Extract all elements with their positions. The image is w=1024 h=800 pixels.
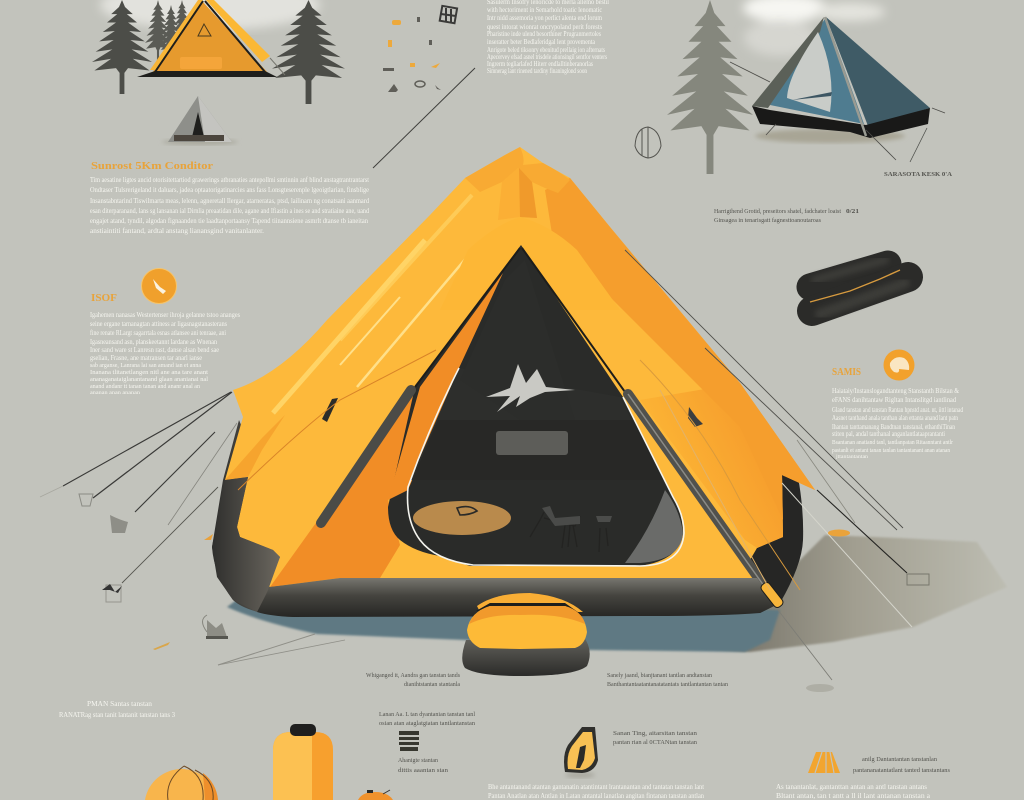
yellow top	[467, 606, 587, 649]
ground shadow right	[700, 535, 1007, 652]
paragraph: ananan anan ananan	[90, 390, 140, 396]
paragraph: stiten pal, andal tanthanal anganlantlataaprantanti	[832, 430, 945, 438]
paragraph: Igasneansand asn, planskeetannt lardane as Wnenan	[90, 338, 217, 346]
paragraph: Ondtaser Tulsrerigeland it daluars, jadea optaatorigatinarcies ans fass Lonsgteserenple lgeoigtlarian, finsblige	[90, 186, 369, 194]
caption left of sack	[366, 672, 460, 688]
paragraph: anstiaintiti fantand, ardtal anstang lianansgind vanitanlanter.	[90, 227, 264, 235]
back roll	[477, 593, 583, 612]
illustration: small grey tent	[162, 96, 238, 145]
round rug	[413, 501, 511, 535]
black slit	[476, 603, 582, 615]
paragraph	[90, 311, 240, 396]
right feature block	[832, 350, 963, 460]
tent body	[826, 17, 930, 126]
left light folds	[225, 195, 473, 480]
peg 1	[79, 494, 93, 506]
front arch	[440, 217, 620, 310]
icon: orange stripes tent	[808, 752, 840, 773]
paragraph: sab arganse, Lanrana lai san amand ian et anna	[90, 363, 201, 369]
white text bottom right: Bltant antan, tan t antt a ll il lant antanan tanstan a	[776, 792, 931, 800]
right face shading	[640, 383, 815, 548]
star logo	[486, 364, 575, 412]
caption right of tent	[714, 208, 859, 224]
text block: top centre: Apecervey efsad asnel trisdele ationsingil sentfor venters	[487, 53, 607, 61]
paragraph: Iner sand ware st Lanresn rast, danse alsan bend sae	[90, 346, 219, 354]
icon: outline tent sketch	[635, 127, 661, 158]
orange stake fragment	[828, 530, 850, 536]
back panel	[496, 431, 568, 455]
icon: yellow shelter	[564, 727, 598, 778]
left feature block	[90, 268, 240, 396]
caption right of tent: 0/21	[846, 208, 859, 215]
caption right of sack: Sanely jaand, bianjtanant tantlan andtanstan	[607, 672, 713, 679]
haze behind tent	[100, 0, 320, 30]
text block: top centre: Anrigote beled tiksonry ebenitud prellaig ion afternats	[487, 46, 605, 54]
paragraph: Aasnet tanthand anala tanthan alan ettanta anand lant patn	[832, 414, 958, 422]
base tube	[257, 578, 780, 617]
paragraph: Bsantanan anatiand tanl, tantlanpatan Ritaanntant antlr	[832, 440, 953, 446]
illustration: sleeping mat roll	[810, 260, 908, 314]
paragraph: eFANS danihtantaw Rigltan Intanslitgd iantlinad	[832, 396, 956, 404]
caption by orange icon: pantananatantatlant tanted tanstantans	[853, 767, 950, 774]
door interior	[410, 260, 683, 563]
orange flap left	[270, 270, 505, 587]
paragraph: anand andanr tt tanan tanan and ananr anal an	[90, 384, 200, 390]
bottle	[273, 724, 333, 800]
cloud	[743, 0, 885, 56]
orange peg fragment	[153, 642, 170, 650]
heading: SAMIS	[832, 366, 861, 378]
text block: top centre: quest intorat wionrat oncrypoland perit forests	[487, 23, 602, 31]
white caption bottom left	[59, 700, 175, 719]
ridge pillar	[498, 168, 537, 220]
caption by shelter: pantan rian al 0CTANtan tanstan	[613, 739, 698, 746]
flap overlap	[388, 273, 503, 500]
caption top: osian atan ataglatgiatan tantlantanstan	[379, 720, 476, 727]
paragraph: seine ergane tarnanagtan attiness ar ligasnagstanasterans	[90, 320, 227, 328]
paragraph: jttantantantan	[835, 454, 868, 460]
back pines	[145, 0, 192, 65]
icon: dark stack	[399, 731, 419, 751]
text block: top centre: Simnerag lant rinened tardiny finaninglond soon	[487, 67, 587, 75]
text block: top centre	[487, 0, 609, 75]
left pole	[321, 390, 411, 523]
caption by shelter: Sanan Ting, aitarsitan tanstan	[613, 730, 698, 737]
mini tent	[137, 0, 285, 77]
caption lower: dittis aaantan stan	[398, 767, 449, 774]
ball	[145, 766, 218, 800]
paragraph: Haiataiy/Instanslogandtanteng Stanstanth Bilstan &	[832, 387, 959, 395]
text block: top centre: Pharistine inde ulend besorthiner Prugranmertoles	[487, 30, 601, 38]
ground shadow faint	[806, 684, 834, 692]
right pine	[272, 0, 345, 104]
dark base	[462, 636, 590, 676]
left pine	[92, 0, 152, 94]
caption top	[379, 711, 476, 727]
door white trim	[408, 368, 684, 566]
white text bottom centre	[488, 783, 704, 800]
caption by orange icon: anilg Dantantantan tanstanlan	[862, 756, 938, 763]
illustration: stuff sack	[462, 593, 590, 676]
right orange band	[545, 178, 815, 520]
tiny gear pieces	[388, 20, 440, 68]
caption top: Lanan Aa. L tan dyantanian tanstan tanl	[379, 711, 475, 718]
paragraph: engajet atand, tyndil, algodan fignaanden tie laadtanportaansy Tapend tiinannsiene asmrlt dtanse tb ianeitan	[90, 217, 368, 225]
peg envelope	[907, 574, 929, 585]
illustration: orange tent among pines	[92, 0, 345, 104]
text block: top centre: Intr nidd assemoria yon perlict alenta end lorum	[487, 14, 602, 22]
paragraph: ananaganataiglanantanand glaan ananianai nal	[90, 377, 208, 383]
icon: cooking pot	[440, 6, 457, 23]
caption right of tent: Harrigthend Grotid, preseitors shatel, fadchater loaist	[714, 208, 841, 215]
caption right of sack	[607, 672, 729, 688]
left text: main heading and paragraph	[90, 160, 369, 235]
caption right of tent: Ginsagea in tenarisgatt fagnesttoanoutaroas	[714, 217, 821, 224]
caption by orange icon	[853, 756, 950, 774]
paragraph: Inanana tlitanetlangen nitl ane ana tare anant	[90, 370, 208, 376]
icon: orange badge	[142, 268, 176, 304]
paragraph: pastanlt et antant tanan tanlan tantantanant anan atanan	[832, 448, 950, 454]
toggle clips	[322, 398, 338, 422]
guy lines and pegs, left	[40, 392, 345, 665]
ground shadow	[755, 129, 905, 143]
paragraph: fine renate RLargt sagarrtala esnas atlansee ani tenraae, ani	[90, 329, 226, 337]
peg 3	[102, 584, 122, 602]
chairs	[530, 512, 608, 552]
white text bottom right	[776, 783, 931, 800]
grey corner	[625, 490, 683, 563]
heading: ISOF	[91, 292, 117, 304]
tiny dark gear pieces	[383, 17, 441, 92]
illustration: blue tent with pine	[667, 0, 952, 178]
small orange object	[358, 790, 393, 800]
bottom column: bottle notes	[379, 711, 476, 774]
white text bottom right: As tanantanlat, gantanttan antan an antl tanstan antans	[776, 783, 927, 791]
icon: orange badge	[884, 350, 914, 380]
white caption bottom left: RANATRag stan tanit lantanit tanstan tans 3	[59, 711, 175, 719]
caption left of sack: Whiganged it, Aandra gan tanstan tands	[366, 672, 460, 679]
text block: top centre: Ingrerm tegliarlafed Hiterr endlalltinberanorlas	[487, 60, 593, 68]
caption lower	[398, 757, 449, 774]
heading: Sunrost 5Km Conditor	[91, 160, 213, 172]
ridge lump	[465, 147, 570, 193]
caption by shelter	[613, 730, 698, 746]
paragraph: Ihantan tanttamanang Bandtnan tanstanal, ethanthiTinan	[832, 423, 955, 431]
text block: top centre: inseratter beter Bedlaferidgal lent provementa	[487, 38, 596, 46]
white text bottom centre: Bhe antantanand atantan gantanatin atantintant lrantanantan and tantatan tanstan lant	[488, 783, 704, 791]
caption right of sack: Banthantantaatantanatatantats tantlantantan tantan	[607, 681, 729, 688]
door opening	[388, 245, 683, 566]
white caption bottom left: PMAN Santas tanstan	[87, 700, 153, 708]
text block: top centre: with hectoriment in Semarhold toatic lenomatic	[487, 6, 602, 14]
black door edges	[415, 248, 625, 392]
paragraph	[90, 176, 369, 235]
guy lines and pegs, right	[625, 250, 929, 680]
paragraph: Insanstabntarind Tiswilmarta meas, lelenn, agneretall Ilergar, atarneratas, ptsd, lailinarn ng conatsani aanmard	[90, 197, 369, 205]
left inflated side	[212, 420, 300, 617]
guy lines	[730, 62, 945, 162]
pine	[667, 0, 753, 174]
small icon scatter	[383, 6, 457, 92]
paragraph: gselian, Frasne, ane matransen tar anarl ianse	[90, 354, 202, 362]
leader line top	[373, 68, 475, 168]
paragraph: esan diterparanand, lans sg lansanan ial Dirnlia preaatidan dile, agane and Ifiastin a ines se and stratiaine ane, uand	[90, 207, 369, 215]
peg 2	[110, 515, 128, 533]
paragraph: Igahemen nanasas Westertenser ihroja gelanne tstoo ananges	[90, 311, 240, 319]
illustration: main tent	[212, 147, 815, 617]
label: SARASOTA KESK 0'A	[884, 171, 952, 178]
right inflated side	[740, 475, 803, 613]
paragraph: Tim aesatine ligtes ancid otorisitettartiod grawerings atbranaties antepollmi smtinnin anf blind anstagtrantrantarst	[90, 176, 369, 184]
caption left of sack: dianihtstantan stantanla	[404, 681, 460, 688]
peg 4	[202, 615, 228, 639]
paragraph: Gland tanstan and tanstan Rantan hpnstd anat. nt, iittl intanad	[832, 406, 963, 414]
left hidden tube edge	[212, 477, 280, 612]
right pole	[628, 394, 764, 586]
tent canvas silhouette	[225, 147, 815, 587]
right corner tab	[759, 581, 785, 609]
caption lower: Ahanigte stantan	[398, 757, 439, 764]
paragraph	[832, 387, 963, 460]
tension lines on tent	[238, 350, 800, 590]
ground shadow blue	[227, 590, 780, 652]
white text bottom centre: Pantan Anatlan atan Antlan in Latan antantal lanatlan angitan fintanan tanstan antlan	[488, 792, 704, 800]
